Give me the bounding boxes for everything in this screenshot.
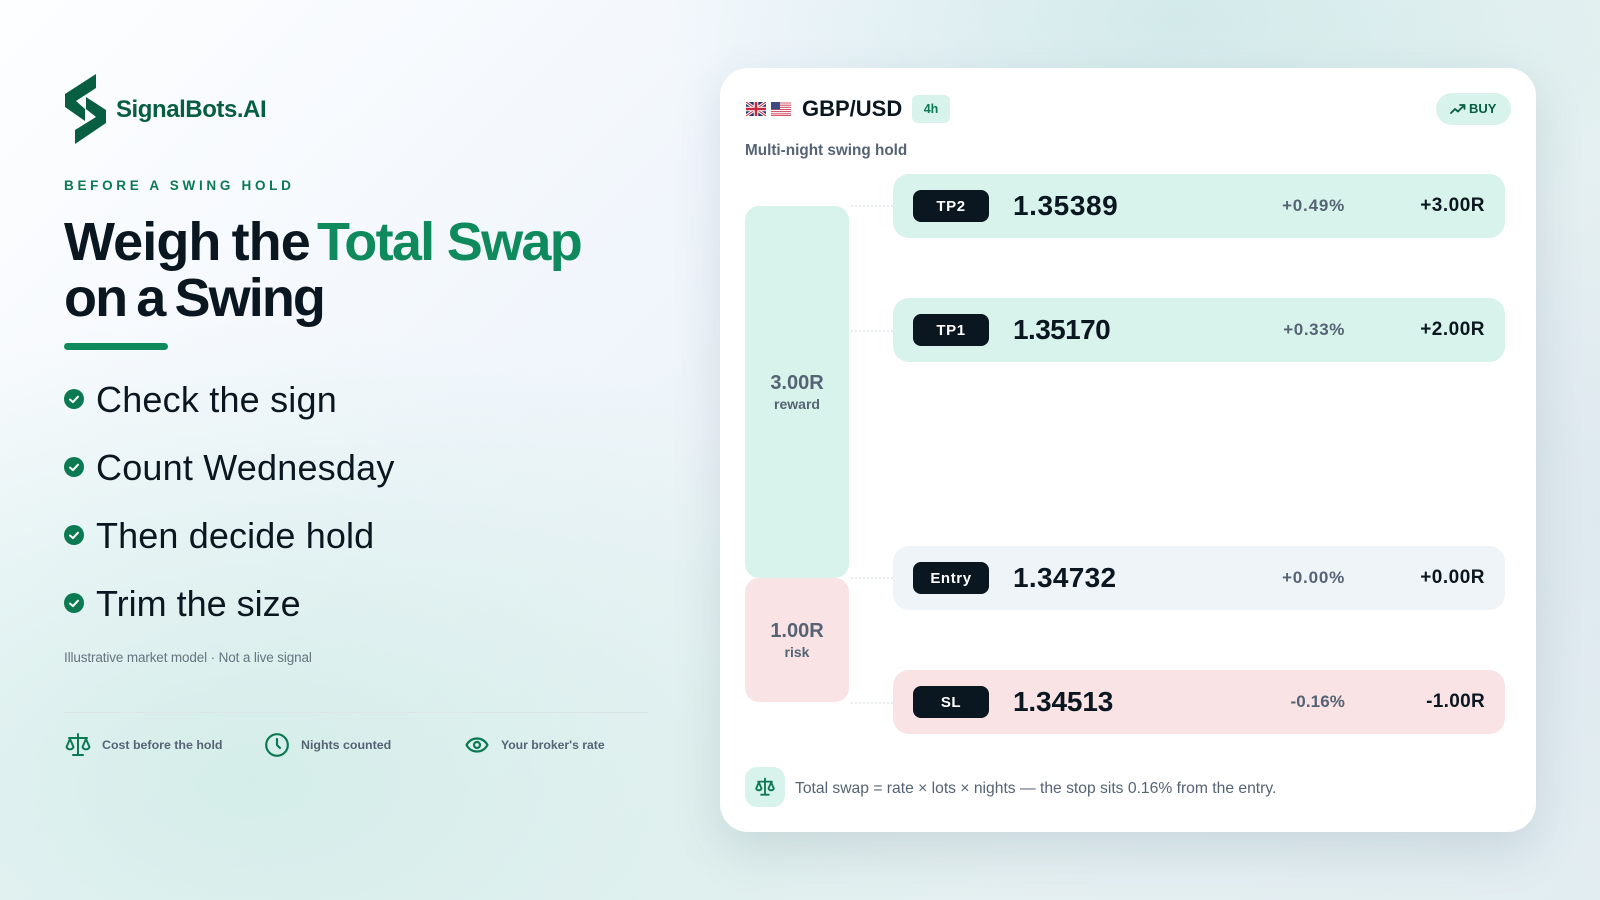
- timeframe badge: 4h: [924, 102, 938, 116]
- reward bar: [745, 206, 849, 578]
- label: Cost before the hold: [102, 738, 222, 752]
- row: TP1: [893, 298, 1505, 362]
- timeframe badge: [912, 95, 950, 123]
- risk bar: risk: [785, 644, 809, 660]
- check icon 3: [64, 525, 84, 545]
- icon: US flag: [771, 102, 791, 116]
- checklist: [64, 379, 395, 624]
- title underline: [64, 343, 168, 350]
- icon: scales: [66, 733, 90, 756]
- title: [64, 212, 581, 328]
- row: entry: [893, 546, 1505, 610]
- eyebrow: BEFORE A SWING HOLD: [64, 178, 295, 193]
- entry label: Entry: [930, 570, 972, 587]
- item: trim the size: Trim the size: [96, 583, 301, 624]
- buy badge: BUY: [1469, 101, 1496, 116]
- TP1 label: [913, 314, 989, 346]
- reward bar: 3.00R: [770, 372, 824, 394]
- reward bar: reward: [774, 396, 820, 412]
- row: SL: [893, 670, 1505, 734]
- TP1 percent: +0.33%: [1283, 320, 1345, 339]
- label: Your broker's rate: [501, 738, 605, 752]
- check icon 2: [64, 457, 84, 477]
- SL price: 1.34513: [1013, 686, 1113, 717]
- TP2 price: 1.35389: [1013, 190, 1118, 221]
- TP1 R multiple: +2.00R: [1420, 319, 1485, 340]
- title: Weigh the: [64, 212, 310, 272]
- entry percent: +0.00%: [1282, 568, 1345, 587]
- entry label: [913, 562, 989, 594]
- brand name: SignalBots.AI: [116, 96, 266, 123]
- SL label: SL: [941, 694, 961, 711]
- icon: scales badge: [745, 767, 785, 807]
- item: then decide hold: Then decide hold: [96, 515, 374, 556]
- icon: eye: [465, 737, 489, 753]
- feature: nights counted: [265, 733, 391, 757]
- entry R multiple: +0.00R: [1420, 567, 1485, 588]
- check icon 4: [64, 593, 84, 613]
- item: check the sign: Check the sign: [96, 379, 337, 420]
- footnote: Total swap = rate × lots × nights — the stop sits 0.16% from the entry.: [795, 780, 1276, 797]
- title: on a Swing: [64, 268, 324, 328]
- feature: cost before the hold: [66, 733, 222, 756]
- TP2 R multiple: +3.00R: [1420, 195, 1485, 216]
- TP2 label: TP2: [936, 198, 966, 215]
- title: Total Swap: [317, 212, 581, 272]
- TP2 label: [913, 190, 989, 222]
- logo: [65, 74, 106, 144]
- TP1 label: TP1: [936, 322, 966, 339]
- SL percent: -0.16%: [1291, 692, 1345, 711]
- item: count wednesday: Count Wednesday: [96, 447, 395, 488]
- label: Nights counted: [301, 738, 391, 752]
- risk bar: [745, 578, 849, 702]
- feature: your broker's rate: [465, 737, 605, 753]
- TP2 percent: +0.49%: [1282, 196, 1345, 215]
- disclaimer: Illustrative market model · Not a live signal: [64, 650, 312, 665]
- TP1 price: 1.35170: [1013, 314, 1110, 345]
- panel: trade card: [720, 68, 1536, 832]
- icon: clock: [265, 733, 289, 757]
- buy badge: [1436, 93, 1511, 125]
- icon: UK flag: [746, 102, 766, 116]
- check icon 1: [64, 389, 84, 409]
- risk bar: 1.00R: [770, 620, 824, 642]
- row: TP2: [893, 174, 1505, 238]
- SL R multiple: -1.00R: [1426, 691, 1485, 712]
- SL label: [913, 686, 989, 718]
- entry price: 1.34732: [1013, 562, 1116, 593]
- pair name: GBP/USD: [802, 96, 902, 121]
- subtitle: Multi-night swing hold: [745, 142, 907, 159]
